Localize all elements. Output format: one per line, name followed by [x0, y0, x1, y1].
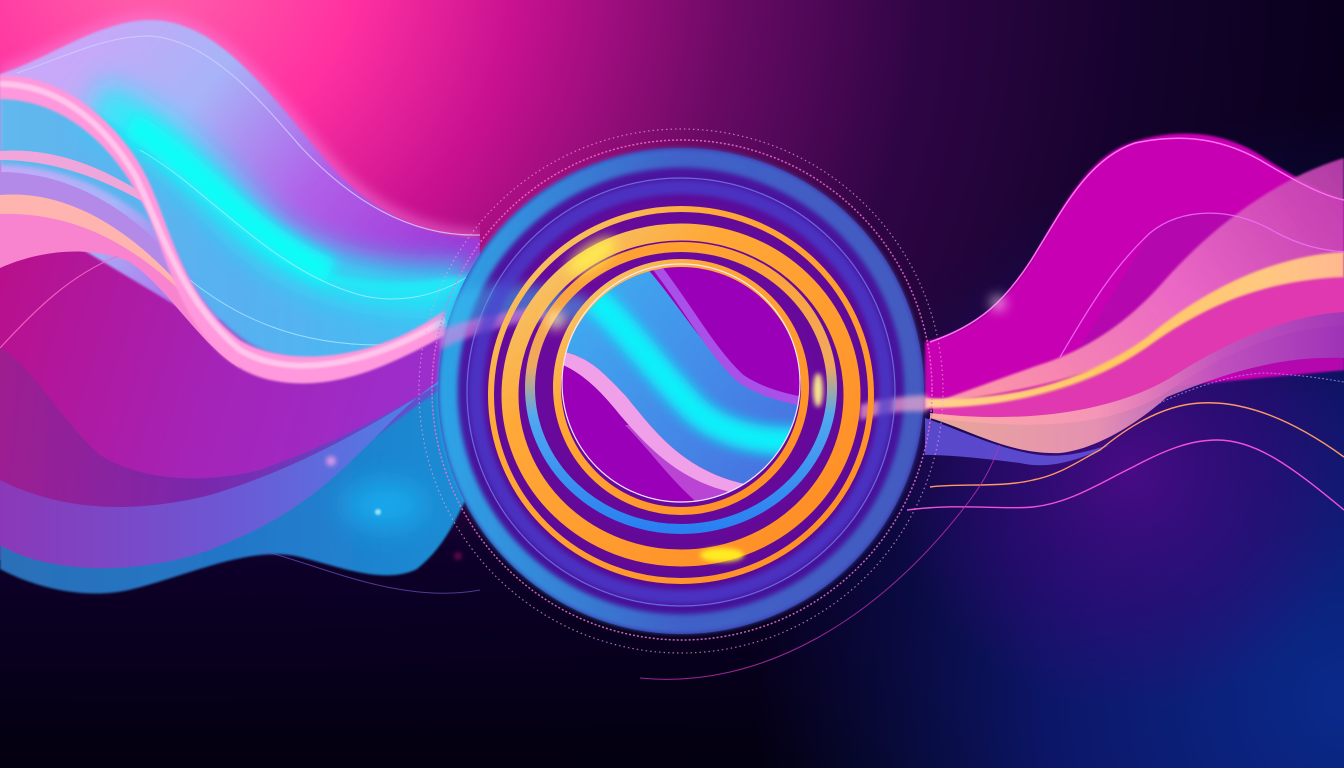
lavender upper veil glow: [0, 20, 480, 238]
thin lilac line: [17, 36, 480, 235]
inner outline: [1060, 213, 1344, 357]
orange inner ring: [557, 263, 805, 511]
long magenta arc: [640, 445, 1000, 679]
cyan wave through ring: [440, 284, 590, 340]
orange thick ring: [510, 232, 852, 558]
mixed orange and blue ring: [530, 247, 832, 529]
sparkle: [991, 296, 1005, 310]
outer blue ring: [448, 158, 914, 624]
inner lilac stripe: [655, 265, 805, 402]
pink ribbon: [0, 75, 445, 383]
pink wave through ring: [440, 305, 545, 350]
thin band lines: [140, 150, 470, 345]
blue band under cyan: [0, 95, 480, 362]
inner disc: [562, 264, 800, 502]
inner pink ribbon: [555, 350, 745, 492]
panel: right waves: [640, 134, 1344, 679]
cyan core: [130, 125, 330, 272]
pink stripe: [0, 150, 144, 202]
yellow streak: [925, 252, 1344, 408]
white inner ring: [562, 264, 800, 502]
glow accents: [326, 456, 462, 560]
lavender upper veil: [0, 20, 480, 320]
outer dotted ring: [419, 129, 943, 653]
magenta wave: [925, 134, 1344, 410]
lavender lower band: [0, 381, 438, 568]
thin rings: [467, 178, 895, 606]
magenta wave darker end: [1060, 212, 1344, 380]
lilac dotted band: [0, 172, 161, 260]
inner lilac ribbon: [625, 425, 728, 500]
dark magenta veil: [0, 348, 470, 560]
disc: [438, 148, 924, 634]
pink lower band: [0, 214, 240, 368]
bottom highlight: [700, 548, 744, 562]
purple body wave: [0, 252, 444, 507]
inner blue wave: [566, 271, 798, 484]
dotted magenta band: [933, 276, 1344, 425]
dotted ring: [432, 140, 932, 640]
inner wave set: [564, 268, 799, 500]
peach band: [0, 194, 178, 288]
pink veil: [933, 158, 1344, 403]
pink line: [907, 440, 1344, 510]
panel: concentric rings: [419, 129, 943, 653]
orange outer ring: [491, 209, 871, 581]
inner cyan wave: [590, 295, 810, 441]
cyan core glow: [95, 105, 470, 287]
left highlight: [547, 311, 565, 329]
right wave through ring: [860, 395, 928, 420]
right highlight: [813, 373, 823, 407]
blue veil: [925, 418, 1110, 465]
periwinkle ring: [476, 187, 886, 597]
bright blue patch: [343, 481, 427, 529]
faint line: [260, 550, 480, 593]
lilac dashed line: [1110, 373, 1344, 430]
peach lower veil: [930, 312, 1344, 453]
ribbon highlight: [0, 84, 445, 366]
panel: left waves: [0, 20, 480, 594]
orange line: [930, 403, 1344, 487]
yellow highlights: [563, 231, 621, 281]
magenta outlines: [930, 138, 1344, 342]
blue lower wave: [0, 370, 470, 594]
thin pink line: [0, 256, 118, 348]
